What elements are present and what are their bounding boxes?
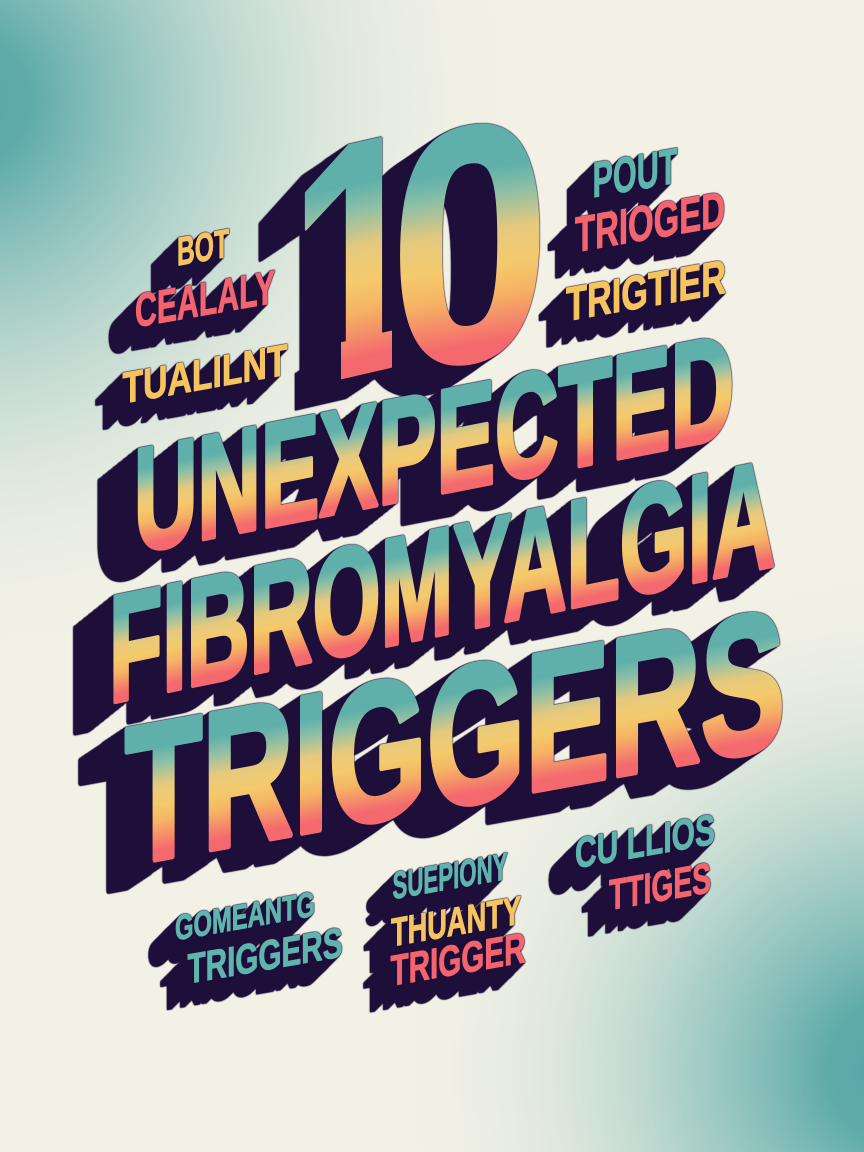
label group: bottom right <box>575 806 715 920</box>
label: BOT: BOT <box>177 221 229 275</box>
label group: top right <box>566 137 726 332</box>
label group: bottom centre <box>390 845 526 996</box>
heading number: 10 <box>258 122 541 412</box>
label: TRIGGER: TRIGGER <box>390 924 526 996</box>
label: THUANTY: THUANTY <box>391 888 521 955</box>
label: TTIGES: TTIGES <box>609 854 711 920</box>
label: CU LLIOS: CU LLIOS <box>575 806 715 878</box>
label: GOMEANTG: GOMEANTG <box>175 885 315 948</box>
label: TUALILNT: TUALILNT <box>122 336 288 413</box>
label: CEALALY: CEALALY <box>135 261 275 338</box>
label: SUEPIONY: SUEPIONY <box>393 845 507 908</box>
digit 1: 1 <box>289 55 427 461</box>
digit 0: 0 <box>390 45 550 444</box>
label group: top left <box>122 221 288 413</box>
label: TRIGGERS: TRIGGERS <box>188 919 342 993</box>
label: TRIOGED: TRIOGED <box>575 180 725 263</box>
label group: bottom left <box>175 885 342 993</box>
label: TRIGTIER: TRIGTIER <box>566 250 726 332</box>
label: POUT: POUT <box>592 137 678 208</box>
